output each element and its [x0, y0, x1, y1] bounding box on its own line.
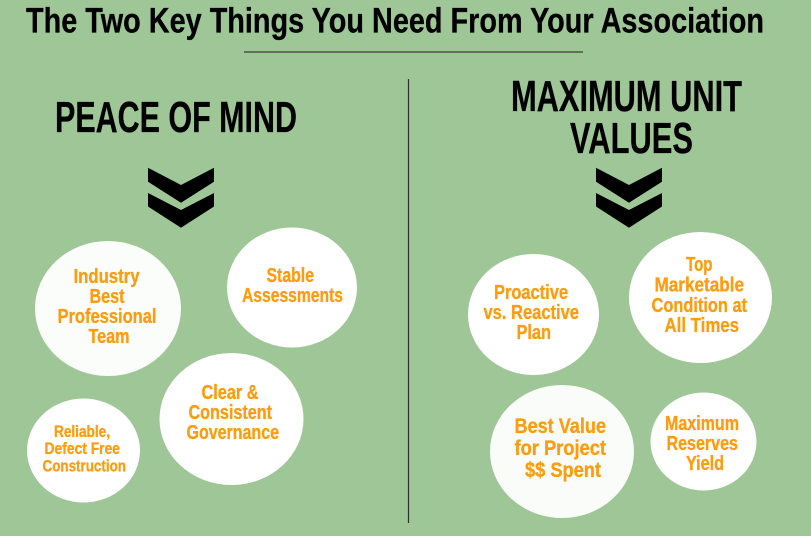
- circle: industry best professional team: Industry: [74, 266, 140, 288]
- circle: top marketable condition: Condition at: [652, 295, 747, 317]
- circle: reliable defect free construction: Construction: [42, 458, 126, 476]
- circle: best value for project: $$ Spent: [525, 458, 601, 482]
- circle: maximum reserves yield: Yield: [686, 453, 724, 475]
- icon: double chevron right: [596, 168, 662, 228]
- circle: top marketable condition: All Times: [664, 315, 739, 337]
- circle: stable assessments: [227, 228, 357, 348]
- heading: peace of mind: PEACE OF MIND: [55, 94, 297, 142]
- circle: stable assessments: Assessments: [242, 285, 343, 307]
- circle: proactive vs reactive plan: Plan: [516, 322, 551, 344]
- circle: clear and consistent governance: Governance: [186, 422, 279, 444]
- circle: industry best professional team: Team: [88, 326, 130, 348]
- circle: reliable defect free construction: Defect Free: [44, 440, 120, 458]
- circle: top marketable condition: Top: [686, 254, 712, 276]
- heading: maximum unit values: VALUES: [570, 115, 693, 163]
- circle: proactive vs reactive plan: vs. Reactive: [484, 302, 579, 324]
- circle: reliable defect free construction: Reliable,: [54, 423, 110, 441]
- circle: top marketable condition: [629, 232, 772, 363]
- circle: best value for project: Best Value: [514, 414, 606, 438]
- circle: clear and consistent governance: Consistent: [188, 402, 272, 424]
- circle: best value for project: for Project: [514, 436, 606, 460]
- circle: reliable defect free construction: [27, 398, 140, 502]
- circle: clear and consistent governance: [160, 353, 304, 485]
- circle: industry best professional team: Professional: [58, 306, 156, 328]
- circle: top marketable condition: Marketable: [654, 274, 744, 296]
- circle: proactive vs reactive plan: Proactive: [494, 282, 568, 304]
- circle: clear and consistent governance: Clear &: [202, 382, 258, 404]
- circle: best value for project: [490, 385, 634, 518]
- panel: maximum unit values circles: [468, 232, 772, 518]
- circle: stable assessments: Stable: [266, 265, 314, 287]
- circle: maximum reserves yield: Maximum: [665, 413, 739, 435]
- circle: maximum reserves yield: [650, 392, 756, 490]
- icon: double chevron left: [148, 168, 214, 228]
- heading: maximum unit values: [511, 73, 742, 163]
- circle: industry best professional team: Best: [90, 286, 125, 308]
- circle: industry best professional team: [35, 241, 181, 376]
- panel: peace of mind circles: [27, 228, 357, 502]
- circle: maximum reserves yield: Reserves: [666, 433, 738, 455]
- circle: proactive vs reactive plan: [468, 254, 599, 375]
